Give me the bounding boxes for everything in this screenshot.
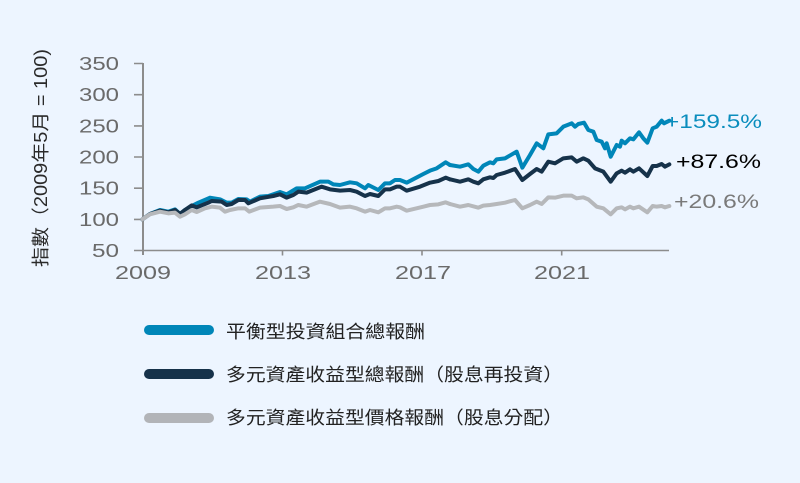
y-axis tick labels: 100 xyxy=(79,209,119,230)
line: balanced portfolio total return xyxy=(142,121,669,219)
y-axis tick labels: 350 xyxy=(79,53,119,74)
y-axis tick labels: 200 xyxy=(79,146,119,168)
legend: 多元資產收益型價格報酬（股息分配） xyxy=(226,408,563,428)
end label: +87.6%: +87.6% xyxy=(676,152,761,173)
y-axis tick labels: 250 xyxy=(79,116,119,136)
end label: +20.6%: +20.6% xyxy=(674,192,759,213)
y-axis title: 指數（2009年5月 = 100) xyxy=(31,49,51,267)
x-axis tick labels xyxy=(115,262,590,283)
x-axis tick labels: 2013 xyxy=(255,262,311,283)
x-axis tick labels: 2021 xyxy=(534,262,590,283)
legend: 平衡型投資組合總報酬 xyxy=(226,322,425,342)
y-axis tick labels xyxy=(79,53,119,261)
line: multi-asset income total return xyxy=(142,157,669,219)
y-axis tick labels: 150 xyxy=(79,178,119,199)
y-axis tick labels: 50 xyxy=(92,240,119,261)
y-axis tick labels: 300 xyxy=(79,84,119,105)
legend xyxy=(144,322,563,428)
x-axis tick labels: 2017 xyxy=(395,262,451,283)
x-axis tick labels: 2009 xyxy=(115,262,171,283)
line: multi-asset income price return xyxy=(142,196,669,219)
chart axes xyxy=(134,63,669,256)
end label: +159.5%: +159.5% xyxy=(665,112,762,133)
legend: 多元資產收益型總報酬（股息再投資） xyxy=(226,365,563,385)
